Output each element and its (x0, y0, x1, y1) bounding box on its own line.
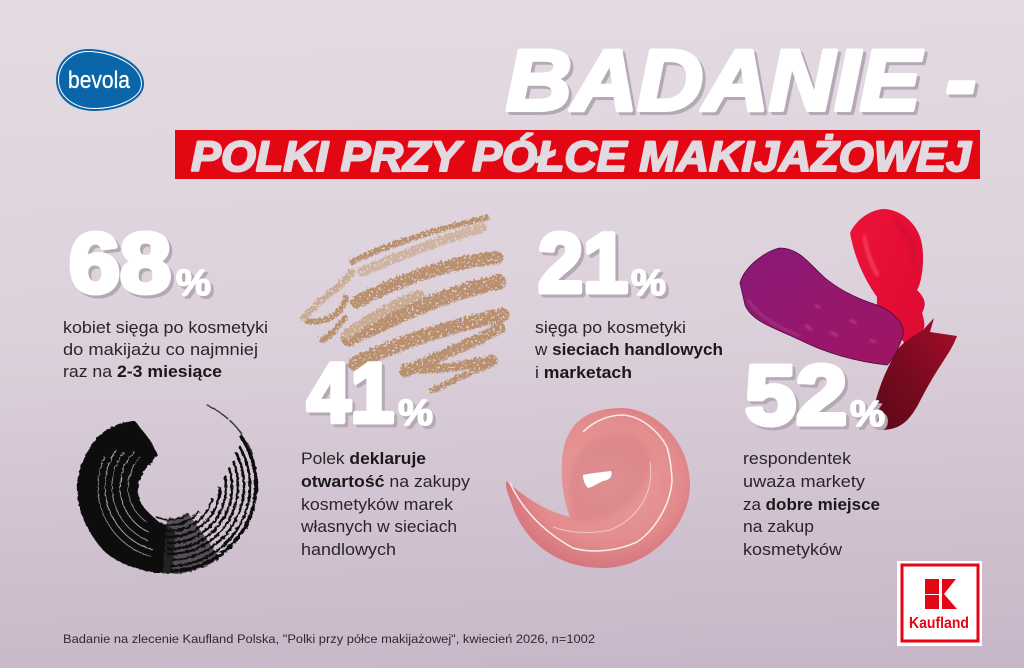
title: BADANIE -: BADANIE - (506, 33, 976, 129)
number 52: 52 (745, 348, 847, 442)
icon: mascara brush swirl (50, 365, 290, 605)
logo: Kaufland (897, 561, 982, 646)
description (743, 449, 880, 559)
description: kosmetyków (743, 540, 843, 559)
percent sign: % (398, 392, 433, 433)
description: i marketach (535, 363, 632, 382)
stat: 21% (534, 216, 723, 382)
number 21: 21 (538, 216, 628, 310)
stat: 52% (743, 348, 885, 559)
description (300, 449, 471, 559)
description: raz na 2-3 miesiące (63, 362, 222, 381)
description: w sieciach handlowych (534, 340, 723, 359)
description (534, 318, 723, 382)
stat: 41% (300, 346, 471, 559)
percent sign: % (176, 262, 211, 303)
description (63, 318, 268, 381)
description: do makijażu co najmniej (63, 340, 258, 359)
description: na zakup (743, 517, 814, 536)
description: sięga po kosmetyki (535, 318, 686, 337)
icon: lip gloss swirl (506, 408, 690, 568)
subtitle banner: POLKI PRZY PÓŁCE MAKIJAŻOWEJ (191, 133, 972, 181)
description: za dobre miejsce (743, 495, 880, 514)
logo: bevola: bevola (68, 67, 131, 94)
logo: bevola (56, 49, 144, 111)
description: kosmetyków marek (301, 495, 454, 514)
number 41: 41 (307, 346, 394, 440)
description: uważa markety (743, 472, 866, 491)
stat: 68% (63, 216, 268, 381)
logo: Kaufland: Kaufland (909, 615, 969, 632)
description: własnych w sieciach (300, 517, 457, 536)
description: respondentek (743, 449, 852, 468)
icon: lipstick smears (740, 209, 957, 430)
dark red smear (873, 318, 957, 430)
percent sign: % (631, 262, 666, 303)
footnote: Badanie na zlecenie Kaufland Polska, "Polki przy półce makijażowej", kwiecień 2026, n=1002 (63, 632, 595, 646)
red smear (850, 209, 925, 344)
description: kobiet sięga po kosmetyki (63, 318, 268, 337)
percent sign: % (850, 393, 885, 434)
number 68: 68 (69, 216, 171, 310)
icon: eyebrow pencil swatch (304, 218, 503, 391)
description: otwartość na zakupy (301, 472, 471, 491)
purple smear (740, 248, 903, 365)
description: handlowych (301, 540, 396, 559)
description: Polek deklaruje (301, 449, 426, 468)
